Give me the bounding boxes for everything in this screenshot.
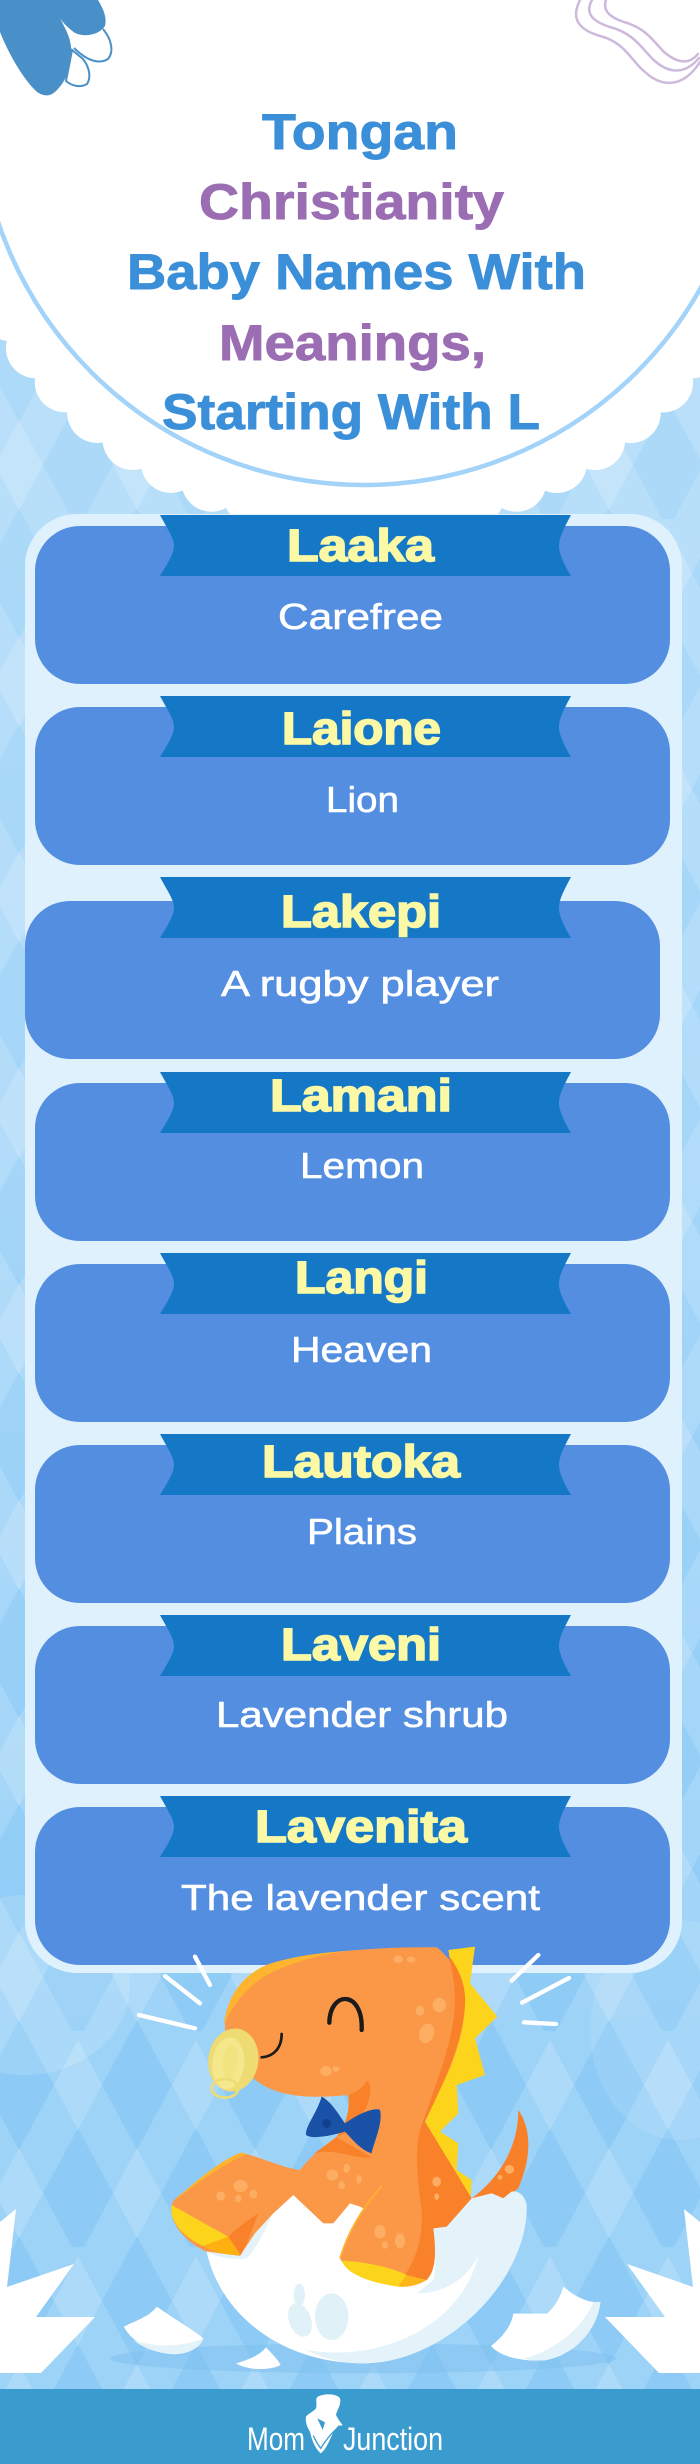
title: Starting With L (162, 384, 540, 440)
white spiky shapes bottom left (0, 2209, 95, 2373)
name card: Laveni (35, 1615, 670, 1784)
title: Baby Names With (127, 244, 586, 300)
name card: Lautoka (35, 1434, 670, 1603)
header scalloped circle (0, 0, 700, 511)
name card: Lautoka: Plains (307, 1511, 417, 1552)
name card: Lavenita (35, 1796, 670, 1965)
title (127, 104, 586, 440)
title: Meanings, (219, 315, 486, 371)
title: Tongan (262, 104, 458, 160)
MomJunction logo (247, 2394, 443, 2457)
footer bar (0, 2389, 700, 2464)
name card: Laveni: Laveni (281, 1619, 441, 1670)
name card: Laione: Lion (326, 779, 399, 820)
name card: Laione: Laione (282, 703, 441, 754)
name card: Lavenita: Lavenita (255, 1801, 468, 1852)
name card: Langi (35, 1252, 670, 1422)
title: Christianity (199, 174, 504, 230)
MomJunction logo: Junction (343, 2421, 443, 2457)
icon: blue blob top left (0, 0, 111, 95)
icon: purple wavy lines top right (576, 0, 700, 83)
name card: Lamani: Lemon (300, 1145, 424, 1186)
name card: Laaka: Laaka (287, 520, 435, 571)
name card: Lautoka: Lautoka (262, 1436, 461, 1487)
name card: Langi: Langi (295, 1252, 428, 1303)
name card: Lakepi: Lakepi (281, 886, 441, 937)
white spiky shapes bottom right (605, 2209, 700, 2373)
list panel background (25, 514, 682, 1973)
name card: Lakepi (25, 877, 660, 1059)
name card: Laione (35, 696, 670, 865)
name card: Lamani (35, 1070, 670, 1241)
name card: Lavenita: The lavender scent (181, 1877, 540, 1918)
name card: Laveni: Lavender shrub (216, 1694, 508, 1735)
name card: Lakepi: A rugby player (221, 963, 499, 1004)
name card: Laaka (35, 515, 670, 684)
name card: Lamani: Lamani (270, 1070, 452, 1121)
MomJunction logo: Mom (247, 2421, 305, 2457)
name card: Laaka: Carefree (278, 596, 443, 637)
illustration: baby dinosaur hatching from egg (110, 1947, 617, 2373)
name card: Langi: Heaven (291, 1329, 432, 1370)
